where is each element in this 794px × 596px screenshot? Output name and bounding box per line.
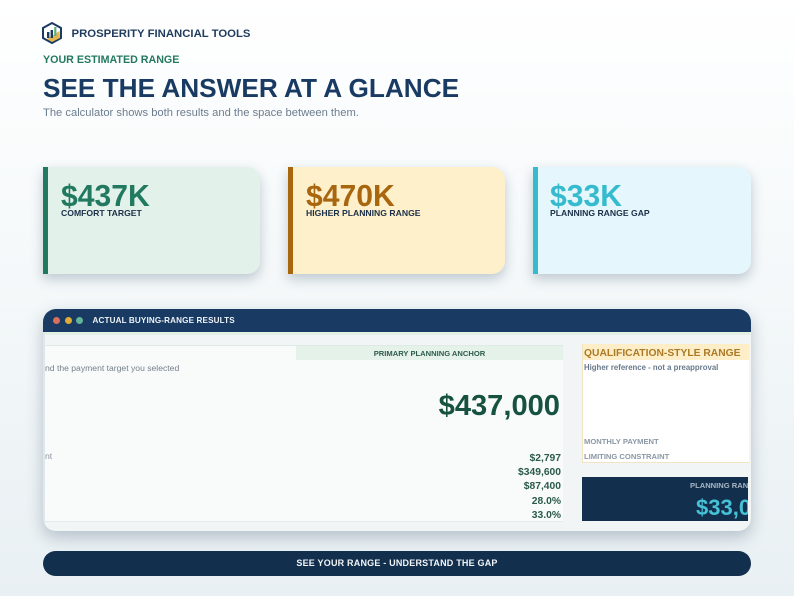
row values — [518, 452, 561, 521]
call to action text: SEE YOUR RANGE - UNDERSTAND THE GAP — [296, 558, 498, 568]
logo icon: hexagon with bars — [42, 22, 62, 44]
stat card: planning range gap: $33K — [550, 180, 622, 213]
results table — [45, 345, 563, 522]
stat card: higher planning range — [288, 167, 505, 274]
brand name: PROSPERITY FINANCIAL TOOLS — [72, 28, 251, 40]
stat card: higher planning range: $470K — [306, 180, 395, 213]
edge strip — [44, 332, 750, 335]
row values: $349,600 — [518, 466, 561, 478]
row values: 28.0% — [532, 496, 561, 506]
subtitle: The calculator shows both results and the space between them. — [43, 106, 359, 118]
left edge — [43, 332, 44, 531]
call to action bar — [43, 551, 751, 576]
stat card: comfort target: $437K — [61, 180, 150, 213]
row values: $87,400 — [524, 481, 561, 492]
clipped description: nd the payment target you selected — [45, 363, 179, 373]
stat card: planning range gap — [533, 167, 751, 274]
row values: 33.0% — [532, 510, 561, 521]
column heading — [296, 346, 563, 360]
window dots — [53, 317, 60, 324]
eyebrow: YOUR ESTIMATED RANGE — [43, 54, 179, 66]
column heading text: PRIMARY PLANNING ANCHOR — [374, 348, 485, 358]
card note: Higher reference - not a preapproval — [584, 363, 718, 372]
stat card: comfort target: COMFORT TARGET — [61, 208, 142, 218]
title: SEE THE ANSWER AT A GLANCE — [43, 73, 459, 103]
row label: LIMITING CONSTRAINT — [584, 452, 669, 460]
gap box — [582, 477, 748, 521]
card heading — [583, 344, 750, 360]
window title bar — [43, 309, 751, 332]
stat card: planning range gap: PLANNING RANGE GAP — [550, 208, 650, 218]
stat card: comfort target — [43, 167, 260, 274]
qualification-style range card — [582, 344, 749, 463]
stat card: higher planning range: HIGHER PLANNING RANGE — [306, 208, 421, 218]
row label: MONTHLY PAYMENT — [584, 436, 659, 446]
row values: $2,797 — [530, 452, 561, 464]
results window panel — [43, 309, 751, 531]
main value: $437,000 — [439, 390, 560, 422]
window title: ACTUAL BUYING-RANGE RESULTS — [92, 316, 235, 324]
card heading text: QUALIFICATION-STYLE RANGE — [584, 348, 741, 358]
clipped row label: nt — [45, 451, 52, 461]
